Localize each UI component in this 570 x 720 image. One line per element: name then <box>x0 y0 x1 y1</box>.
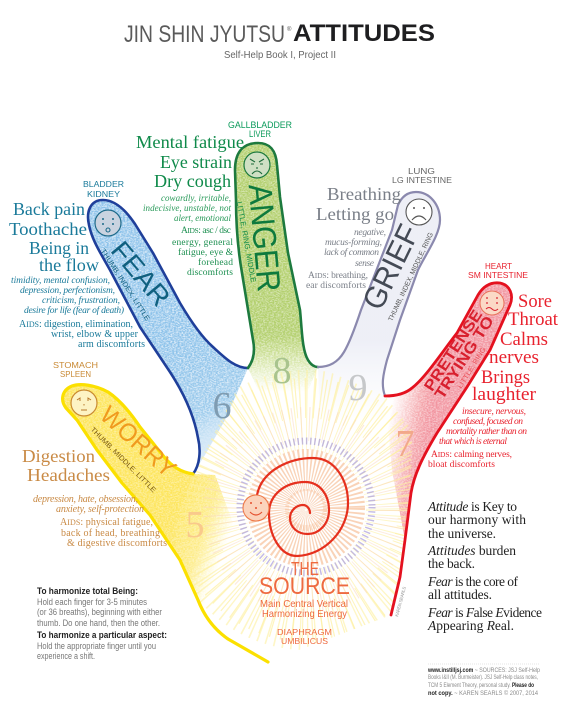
symptoms: Eye strain <box>160 152 232 172</box>
texture: blue pencil <box>88 200 248 474</box>
attitudes list: desire for life (fear of death) <box>24 305 124 316</box>
title: JIN SHIN JYUTSU <box>124 21 285 48</box>
aids: fatigue, eye & <box>178 247 234 258</box>
attitude statement: Attitudes burden <box>427 543 516 558</box>
face: pretend smile <box>480 291 504 315</box>
organs: heart small intestine <box>468 261 528 280</box>
attitudes list: confused, focused on <box>453 416 523 427</box>
symptoms: Breathing <box>327 184 401 204</box>
aids <box>19 319 145 350</box>
symptoms: Mental fatigue <box>136 132 244 152</box>
symptoms: Throat <box>508 309 559 330</box>
harmonize instructions: To harmonize total Being: <box>37 586 138 596</box>
outline: green finger <box>235 143 318 368</box>
hand outline <box>63 143 512 662</box>
credits <box>427 664 541 697</box>
aids: back of head, breathing <box>61 528 160 539</box>
aids: ear discomforts <box>306 280 366 291</box>
symptoms: the flow <box>39 255 99 275</box>
texture: red pencil <box>385 283 512 540</box>
palm energy rays <box>194 398 418 622</box>
attitudes list: mortality rather than on <box>446 427 527 437</box>
attitudes list: alert, emotional <box>174 213 231 223</box>
attitudes list <box>324 228 386 269</box>
attitude statement: Attitude is Key to <box>427 499 517 514</box>
texture: green pencil <box>235 143 318 398</box>
organs: bladder kidney: BLADDER <box>83 179 124 189</box>
symptoms: Sore <box>518 291 552 312</box>
organs: stomach spleen: SPLEEN <box>60 369 91 379</box>
texture: yellow pencil <box>63 385 250 652</box>
finger points: thumb index middle ring: THUMB, INDEX, MIDDLE, RING <box>388 232 435 323</box>
source description: Harmonizing Energy <box>262 608 348 620</box>
panel: the source <box>243 495 350 646</box>
symptoms: Back pain <box>13 199 85 219</box>
attitudes list <box>11 275 124 316</box>
attitudes list: sense <box>355 259 374 269</box>
orange pencil disc <box>268 470 344 546</box>
symptoms <box>472 291 559 405</box>
symptoms: Toothache <box>9 219 87 239</box>
harmonize instructions: Hold the appropriate finger until you <box>37 641 156 651</box>
aids: & digestive discomforts <box>67 538 167 549</box>
harmonize instructions: To harmonize a particular aspect: <box>37 630 167 640</box>
organs: lung large intestine <box>392 166 452 185</box>
aids: AIDS: breathing, <box>308 271 368 281</box>
organs: heart small intestine: HEART <box>485 261 512 271</box>
attitudes list: depression, hate, obsession, <box>33 494 138 505</box>
attitude statement: all attitudes. <box>428 587 492 602</box>
number 6: 6 <box>212 385 232 427</box>
source description: Main Central Vertical <box>260 598 348 610</box>
face: sad <box>406 199 432 225</box>
symptoms: Being in <box>29 238 89 258</box>
symptoms: Calms <box>500 329 548 350</box>
attitudes list <box>143 193 231 223</box>
source heading: SOURCE <box>259 573 350 600</box>
source spiral emblem <box>240 441 372 573</box>
aids: arm discomforts <box>78 339 145 350</box>
attitude statement: the universe. <box>428 526 496 541</box>
organs: gallbladder liver <box>228 120 292 139</box>
finger label: worry: WORRY <box>94 401 182 483</box>
symptoms: Digestion <box>22 446 95 466</box>
aids <box>60 517 167 549</box>
attitudes list: cowardly, irritable, <box>161 193 231 203</box>
credits: Books I&II (M. Burmeister). JSJ Self-Help class notes, <box>428 675 538 681</box>
finger label: trying to: TRYING TO <box>432 313 498 402</box>
attitudes list: insecure, nervous, <box>462 407 526 417</box>
face: fearful <box>95 210 121 236</box>
source heading <box>259 559 350 600</box>
finger points: little ring: LITTLE, RING <box>457 346 488 390</box>
finger points: thumb index little: THUMB, INDEX, LITTLE <box>99 248 151 323</box>
attitudes list: timidity, mental confusion, <box>11 275 110 286</box>
outline: yellow thumb <box>63 385 268 662</box>
aids: energy, general <box>172 238 233 248</box>
source description <box>260 598 348 620</box>
symptoms: Brings <box>481 367 530 388</box>
attitude statement: Appearing Real. <box>427 618 514 633</box>
attitudes list: indecisive, unstable, not <box>143 203 231 213</box>
symptoms: Letting go <box>316 204 394 224</box>
number 5: 5 <box>186 504 204 546</box>
organs: bladder kidney: KIDNEY <box>87 189 120 199</box>
symptoms <box>22 446 110 485</box>
aids: bloat discomforts <box>428 459 495 470</box>
aids: AIDS: asc / dsc <box>181 226 231 236</box>
fill: index finger red <box>385 283 512 540</box>
hand colour fills <box>63 143 512 652</box>
organs: stomach spleen: STOMACH <box>53 360 98 370</box>
credits: not copy. ~ KAREN SEARLS © 2007, 2014 <box>428 690 539 697</box>
panel: grief <box>306 166 452 323</box>
symptoms: laughter <box>472 384 537 405</box>
harmonize instructions: (or 36 breaths), beginning with either <box>37 607 162 617</box>
aids: forehead <box>198 257 233 268</box>
attitude statement: the back. <box>428 556 475 571</box>
aids: AIDS: physical fatigue, <box>60 517 153 528</box>
source heading: THE <box>291 559 319 579</box>
symptoms <box>136 132 244 191</box>
organs: lung large intestine: LUNG <box>408 166 435 176</box>
aids <box>428 450 512 470</box>
organs: bladder kidney <box>83 179 124 199</box>
aids: AIDS: calming nerves, <box>431 450 512 460</box>
attitudes list <box>33 494 144 515</box>
face: angry <box>244 152 270 178</box>
finger label: fear: FEAR <box>105 235 176 312</box>
harmonize instructions: experience a shift. <box>37 651 95 661</box>
fill: little finger blue <box>88 200 248 474</box>
symptoms: Headaches <box>27 465 110 485</box>
aids <box>306 271 368 291</box>
attitudes list: criticism, frustration, <box>42 295 120 306</box>
subtitle: Self-Help Book I, Project II <box>224 49 336 61</box>
outline: blue finger <box>88 200 248 474</box>
credits: www.instilljsj.com ~ SOURCES: JSJ Self-Help <box>427 668 541 674</box>
attitude statement: our harmony with <box>428 512 526 527</box>
organs: heart small intestine: SM INTESTINE <box>468 270 528 280</box>
finger label: anger: ANGER <box>242 182 288 293</box>
attitudes list: mucus-forming, <box>325 237 382 248</box>
outline: grey finger <box>318 192 440 396</box>
number 8: 8 <box>272 350 292 392</box>
finger points: little ring middle: LITTLE, RING, MIDDLE <box>235 201 258 283</box>
title: ® <box>287 26 292 33</box>
purple ring <box>240 441 372 573</box>
finger label: grief: GRIEF <box>355 219 426 315</box>
fill: thumb yellow <box>63 385 250 652</box>
symptoms <box>316 184 401 224</box>
attitudes list <box>439 407 527 447</box>
panel: anger <box>136 120 292 293</box>
artist signature: KAREN SEARLS <box>394 586 407 617</box>
finger points: thumb middle little: THUMB, MIDDLE, LITTLE <box>89 426 157 494</box>
aids: AIDS: digestion, elimination, <box>19 319 133 330</box>
organs: diaphragm umbilicus <box>277 627 332 646</box>
harmonize instructions: Hold each finger for 3-5 minutes <box>37 597 147 607</box>
panel: worry <box>22 360 182 549</box>
panel: fear <box>9 179 176 350</box>
face: source smile <box>243 495 269 521</box>
aids <box>172 226 234 278</box>
fill: ring finger green <box>235 143 318 398</box>
face: worried <box>71 390 97 416</box>
aids: discomforts <box>187 267 233 278</box>
red spiral <box>257 458 348 556</box>
fill: middle finger grey <box>318 192 440 425</box>
orange pencil centre <box>295 499 317 521</box>
finger label: pretense: PRETENSE <box>421 307 486 394</box>
symptoms <box>9 199 99 275</box>
panel: pretense <box>421 261 559 470</box>
symptoms: nerves <box>489 347 539 368</box>
title <box>124 20 435 48</box>
organs: lung large intestine: LG INTESTINE <box>392 175 452 185</box>
organs: gallbladder liver: LIVER <box>249 129 271 139</box>
credits: TCM 5 Element Theory, personal study. Please do <box>428 683 534 689</box>
organs: stomach spleen <box>53 360 98 379</box>
outline: red finger <box>385 283 512 615</box>
organs: diaphragm umbilicus: DIAPHRAGM <box>277 627 332 637</box>
attitude statement: Fear is False Evidence <box>427 605 542 620</box>
symptoms: Dry cough <box>154 171 231 191</box>
harmonize instructions <box>37 586 167 661</box>
aids: wrist, elbow & upper <box>51 329 139 340</box>
number 9: 9 <box>348 367 368 409</box>
harmonize instructions: thumb. Do one hand, then the other. <box>37 618 160 628</box>
attitudes list: that which is eternal <box>439 437 507 447</box>
number 7: 7 <box>396 423 414 465</box>
attitude statement: Fear is the core of <box>427 574 518 589</box>
attitudes list: anxiety, self-protection <box>56 504 144 515</box>
title: ATTITUDES <box>293 20 435 47</box>
organs: diaphragm umbilicus: UMBILICUS <box>281 636 328 646</box>
attitude statement <box>427 499 542 633</box>
organs: gallbladder liver: GALLBLADDER <box>228 120 292 130</box>
attitudes list: lack of common <box>324 247 379 258</box>
finger numbers <box>186 350 414 546</box>
attitudes list: depression, perfectionism, <box>20 285 115 296</box>
attitudes list: negative, <box>354 228 386 238</box>
